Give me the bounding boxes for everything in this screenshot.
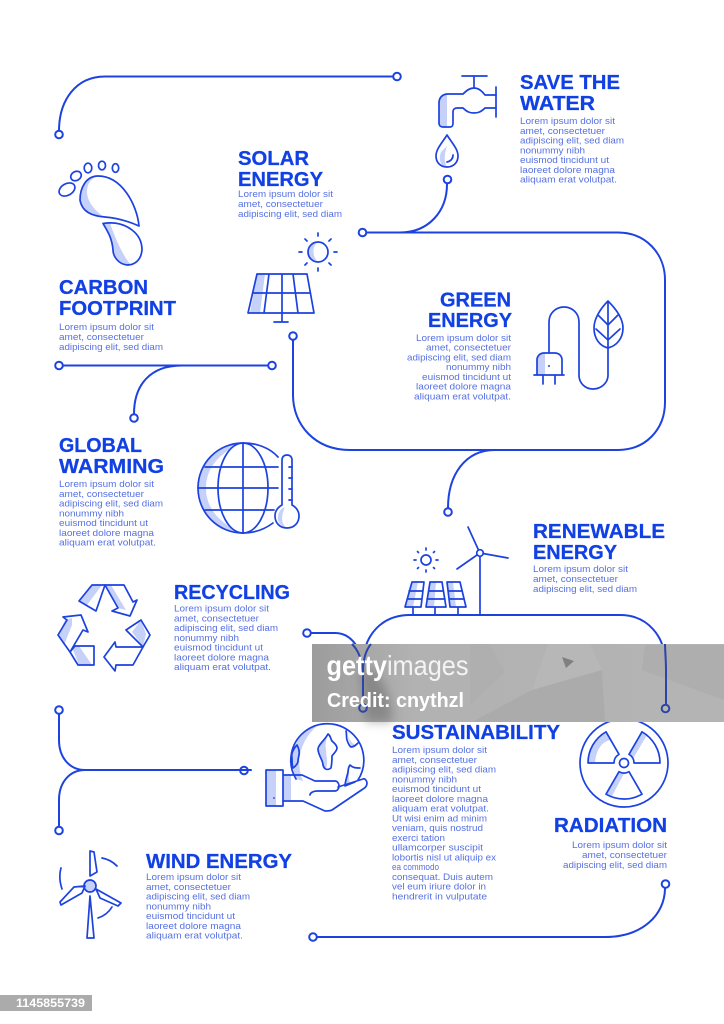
- text block: exerci tation: [392, 833, 445, 843]
- heading: SAVE THE: [520, 72, 620, 94]
- text block: amet, consectetuer: [426, 343, 511, 353]
- text block: [238, 189, 342, 219]
- heading: GLOBAL: [59, 435, 142, 457]
- panel: renewable energy: [405, 521, 665, 615]
- icon: hand holding earth: [266, 724, 367, 811]
- text block: veniam, quis nostrud: [392, 823, 483, 833]
- text block: laoreet dolore magna: [146, 921, 242, 931]
- heading: [59, 277, 176, 320]
- heading: [533, 521, 665, 564]
- text block: Lorem ipsum dolor sit: [59, 479, 154, 489]
- heading: RECYCLING: [174, 582, 290, 604]
- heading: [238, 148, 324, 191]
- panel: green energy: [407, 290, 623, 402]
- heading: ENERGY: [428, 310, 513, 332]
- text block: Lorem ipsum dolor sit: [238, 189, 333, 199]
- panel: global warming: [59, 435, 299, 548]
- text block: nonummy nibh: [59, 508, 124, 518]
- panel: sustainability: [266, 722, 561, 901]
- heading: WARMING: [59, 456, 164, 478]
- text block: adipiscing elit, sed diam: [174, 623, 278, 633]
- panel: carbon footprint: [57, 161, 176, 352]
- text block: ullamcorper suscipit: [392, 842, 483, 852]
- text block: Lorem ipsum dolor sit: [59, 322, 154, 332]
- text block: Lorem ipsum dolor sit: [174, 604, 269, 614]
- text block: Lorem ipsum dolor sit: [533, 564, 628, 574]
- text block: [174, 604, 278, 672]
- icon: globe and thermometer: [198, 443, 299, 533]
- heading: WATER: [520, 93, 596, 115]
- text block: nonummy nibh: [146, 901, 211, 911]
- icon: solar panel and sun: [248, 233, 337, 322]
- text block: Lorem ipsum dolor sit: [572, 840, 667, 850]
- heading: RADIATION: [554, 815, 667, 837]
- text block: euismod tincidunt ut: [520, 155, 609, 165]
- text block: laoreet dolore magna: [392, 794, 489, 804]
- text block: aliquam erat volutpat.: [174, 662, 271, 672]
- text block: adipiscing elit, sed diam: [146, 892, 250, 902]
- text block: aliquam erat volutpat.: [414, 392, 511, 402]
- text block: [59, 322, 163, 352]
- connector: renewable energy arch: [303, 615, 665, 705]
- text block: adipiscing elit, sed diam: [563, 860, 667, 870]
- text block: aliquam erat volutpat.: [59, 538, 156, 548]
- heading: CARBON: [59, 277, 148, 299]
- text block: [407, 333, 512, 402]
- text block: euismod tincidunt ut: [174, 642, 263, 652]
- icon: wind turbine: [60, 851, 121, 938]
- text block: laoreet dolore magna: [416, 382, 512, 392]
- text block: [392, 745, 496, 901]
- text block: amet, consectetuer: [59, 332, 144, 342]
- text block: amet, consectetuer: [533, 574, 618, 584]
- text block: Lorem ipsum dolor sit: [392, 745, 487, 755]
- heading: GREEN: [440, 290, 511, 312]
- panel: wind energy: [60, 851, 293, 940]
- text block: laoreet dolore magna: [520, 165, 616, 175]
- text block: lobortis nisl ut aliquip ex: [392, 852, 496, 862]
- heading: [520, 72, 620, 115]
- heading: ENERGY: [238, 169, 324, 191]
- text block: [520, 116, 624, 184]
- icon: plug and leaf: [534, 301, 623, 389]
- heading: WIND ENERGY: [146, 851, 293, 873]
- heading: RENEWABLE: [533, 521, 665, 543]
- text block: [563, 840, 667, 870]
- watermark band: [312, 644, 724, 722]
- text block: euismod tincidunt ut: [422, 372, 511, 382]
- heading: ENERGY: [533, 542, 618, 564]
- text block: Lorem ipsum dolor sit: [146, 872, 241, 882]
- text block: amet, consectetuer: [174, 613, 259, 623]
- icon: footprint: [57, 161, 142, 265]
- text block: amet, consectetuer: [392, 755, 477, 765]
- panel: solar energy: [238, 148, 342, 322]
- icon: tap and water drop: [436, 76, 496, 167]
- text block: adipiscing elit, sed diam: [238, 209, 342, 219]
- text block: amet, consectetuer: [59, 489, 144, 499]
- text block: aliquam erat volutpat.: [146, 930, 243, 940]
- text block: adipiscing elit, sed diam: [392, 764, 496, 774]
- heading: FOOTPRINT: [59, 298, 176, 320]
- text block: laoreet dolore magna: [59, 528, 155, 538]
- text block: aliquam erat volutpat.: [392, 804, 489, 814]
- panel: save the water: [436, 72, 624, 184]
- panel: radiation: [554, 719, 668, 870]
- image id tag: 1145855739: [16, 996, 85, 1010]
- text block: adipiscing elit, sed diam: [59, 498, 163, 508]
- connector: top line: [55, 73, 401, 138]
- text block: laoreet dolore magna: [174, 652, 270, 662]
- connector: carbon footprint to global warming: [55, 362, 276, 422]
- text block: nonummy nibh: [446, 362, 511, 372]
- text block: euismod tincidunt ut: [59, 518, 148, 528]
- text block: vel eum iriure dolor in: [392, 882, 486, 892]
- text block: consequat. Duis autem: [392, 872, 493, 882]
- heading: [428, 290, 513, 332]
- text block: amet, consectetuer: [238, 199, 323, 209]
- connector: large loop around green energy: [289, 176, 665, 516]
- heading: SOLAR: [238, 148, 310, 170]
- text block: hendrerit in vulputate: [392, 891, 487, 901]
- text block: [146, 872, 250, 940]
- icon: radiation symbol: [580, 719, 668, 807]
- text block: Lorem ipsum dolor sit: [520, 116, 615, 126]
- watermark wordmark: gettyimages: [326, 650, 468, 681]
- text block: euismod tincidunt ut: [392, 784, 481, 794]
- icon: solar panels, sun and wind turbine: [405, 527, 508, 615]
- icon: recycling arrows: [58, 585, 150, 671]
- panel: recycling: [58, 582, 290, 672]
- watermark: lines seen through the band: [352, 644, 669, 712]
- text block: [533, 564, 637, 594]
- text block: ea commodo: [392, 862, 439, 872]
- connector: bottom line: [309, 880, 669, 941]
- watermark credit: Credit: cnythzl: [327, 690, 464, 712]
- text block: nonummy nibh: [174, 633, 239, 643]
- text block: amet, consectetuer: [520, 126, 605, 136]
- text block: Lorem ipsum dolor sit: [416, 333, 511, 343]
- text block: aliquam erat volutpat.: [520, 174, 617, 184]
- text block: adipiscing elit, sed diam: [520, 136, 624, 146]
- text block: nonummy nibh: [392, 774, 457, 784]
- text block: adipiscing elit, sed diam: [407, 352, 511, 362]
- text block: nonummy nibh: [520, 145, 585, 155]
- image id tag: [0, 995, 92, 1011]
- heading: SUSTAINABILITY: [392, 722, 561, 744]
- text block: euismod tincidunt ut: [146, 911, 235, 921]
- text block: adipiscing elit, sed diam: [533, 584, 637, 594]
- text block: amet, consectetuer: [582, 850, 667, 860]
- text block: amet, consectetuer: [146, 882, 231, 892]
- text block: [59, 479, 163, 548]
- text block: adipiscing elit, sed diam: [59, 342, 163, 352]
- connector: left fork: [55, 706, 251, 834]
- text block: Ut wisi enim ad minim: [392, 813, 487, 823]
- heading: [59, 435, 164, 478]
